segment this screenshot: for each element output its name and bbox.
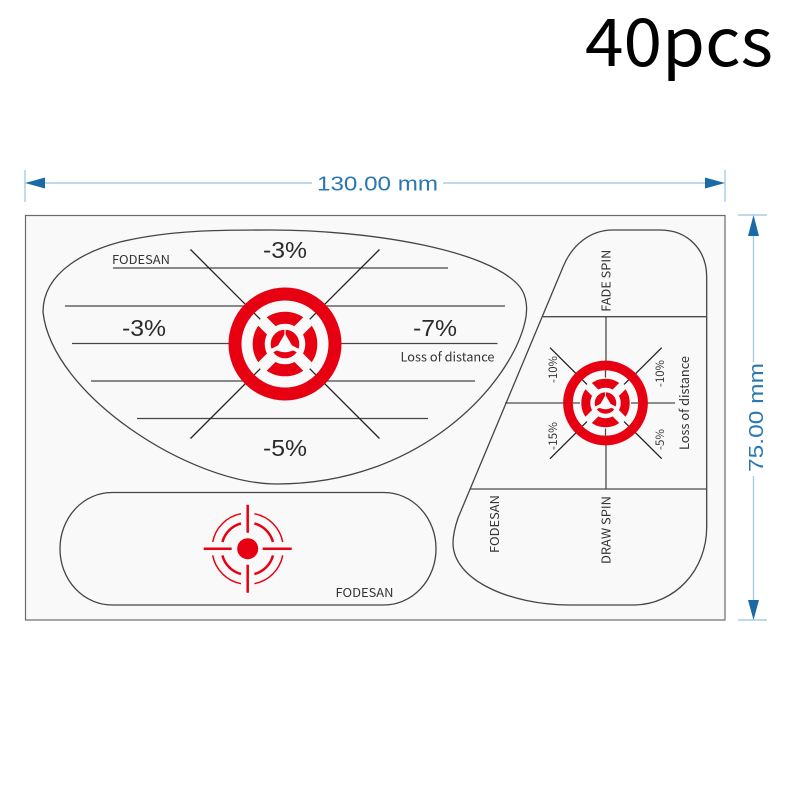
fairway sticker: right xyxy=(453,230,707,605)
label: upper left percent: -10% xyxy=(545,356,561,383)
label: brand: FODESAN xyxy=(336,584,394,601)
label: top percent: -3% xyxy=(263,237,307,263)
label: lower right percent: -5% xyxy=(652,429,668,450)
icon: crosshair xyxy=(204,505,292,593)
target: small xyxy=(568,366,643,440)
label: draw spin: DRAW SPIN xyxy=(598,496,615,564)
height dimension: 75.00 mm xyxy=(738,215,768,620)
height dimension: 75.00 mm: 75.00 mm xyxy=(745,363,768,472)
label: brand: FODESAN xyxy=(486,495,503,553)
label: upper right percent: -10% xyxy=(652,360,668,387)
width dimension: 130.00 mm xyxy=(25,170,725,202)
label: right percent: -7% xyxy=(413,315,457,341)
target: large xyxy=(235,294,335,394)
panel: sticker sheet xyxy=(26,216,725,620)
label: lower left percent: -15% xyxy=(545,422,561,450)
label: brand: FODESAN xyxy=(112,251,170,268)
pill outline xyxy=(60,492,436,605)
diagonal guide lines xyxy=(190,250,380,438)
label: loss of distance: Loss of distance xyxy=(400,346,495,366)
width dimension: 130.00 mm: 130.00 mm xyxy=(317,172,438,196)
label: loss of distance: Loss of distance xyxy=(674,356,693,450)
diagonal guide lines xyxy=(550,348,662,459)
driver sticker: large face xyxy=(43,230,527,484)
label: left percent: -3% xyxy=(122,315,166,341)
guide lines xyxy=(470,317,707,489)
bottom sticker: pill xyxy=(60,492,436,605)
driver face outline xyxy=(43,230,527,484)
horizontal guide lines xyxy=(65,268,505,418)
label: fade spin: FADE SPIN xyxy=(598,250,615,312)
label: bottom percent: -5% xyxy=(263,435,307,461)
fairway outline xyxy=(453,230,707,605)
